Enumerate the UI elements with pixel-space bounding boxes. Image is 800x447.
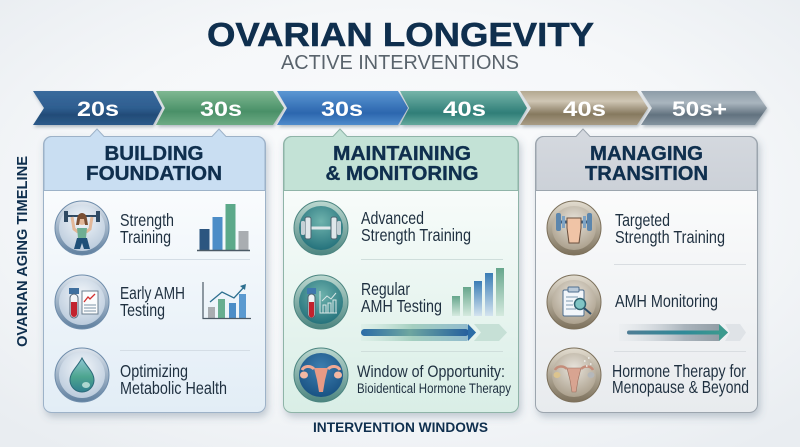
text: hormone therapy for menopause: Menopause & Beyond <box>612 377 749 397</box>
bar chart: rising amh <box>452 268 504 316</box>
header: managing transition: TRANSITION <box>585 163 708 185</box>
text: regular amh testing: AMH Testing <box>361 296 442 316</box>
icon: fading uterus <box>547 348 601 402</box>
chevron: 40s teal: 40s <box>443 98 486 121</box>
panel: managing transition <box>536 129 758 412</box>
chevron: 40s taupe: 40s <box>563 98 606 121</box>
chevron: 40s taupe <box>520 91 648 125</box>
text: hormone therapy for menopause <box>612 361 749 397</box>
header: building foundation: FOUNDATION <box>86 163 222 185</box>
panel: building foundation <box>44 129 266 412</box>
arrow: progress <box>361 324 507 341</box>
chart: rising trend <box>203 282 251 318</box>
header: maintaining and monitoring <box>284 129 518 190</box>
footer label: INTERVENTION WINDOWS <box>313 420 488 435</box>
icon: fist with dumbbell <box>547 201 601 255</box>
chevron: 50s+ <box>641 91 767 125</box>
chevron: 50s+: 50s+ <box>672 98 727 121</box>
title: OVARIAN LONGEVITY <box>207 16 594 53</box>
chevron: 40s teal <box>400 91 527 125</box>
text: early amh testing <box>120 283 185 320</box>
icon: water drop <box>55 348 109 402</box>
text: targeted strength training <box>615 210 725 247</box>
text: early amh testing: Early AMH <box>120 283 185 303</box>
subtitle: ACTIVE INTERVENTIONS <box>281 52 519 74</box>
header: maintaining and monitoring: MAINTAINING <box>333 143 471 165</box>
header: managing transition: MANAGING <box>590 143 703 165</box>
text: optimizing metabolic health <box>120 361 227 398</box>
text: early amh testing: Testing <box>120 300 165 320</box>
chevron: 20s: 20s <box>77 98 119 121</box>
text: amh monitoring: AMH Monitoring <box>615 291 718 311</box>
panel: maintaining and monitoring <box>284 129 518 412</box>
text: advanced strength training <box>361 208 471 245</box>
text: window of opportunity: Bioidentical Hormone Therapy <box>357 381 511 396</box>
text: hormone therapy for menopause: Hormone Therapy for <box>612 361 746 381</box>
header: building foundation <box>44 129 265 190</box>
header: building foundation: BUILDING <box>104 143 204 165</box>
icon: clipboard with magnifier <box>547 275 601 329</box>
text: targeted strength training: Targeted <box>615 210 670 230</box>
text: strength training <box>120 210 174 247</box>
arrow: progress <box>619 324 746 341</box>
chevron: 30s green <box>156 91 284 125</box>
chevron: 30s blue: 30s <box>321 98 363 121</box>
text: optimizing metabolic health: Metabolic Health <box>120 378 227 398</box>
icon: dumbbell <box>294 201 348 255</box>
bar chart: strength <box>197 204 250 250</box>
vertical axis label: OVARIAN AGING TIMELINE <box>15 156 31 347</box>
text: regular amh testing <box>361 279 442 316</box>
text: advanced strength training: Advanced <box>361 208 424 228</box>
text: optimizing metabolic health: Optimizing <box>120 361 188 381</box>
chevron: 30s green: 30s <box>200 98 242 121</box>
header: managing transition <box>536 129 757 190</box>
text: window of opportunity <box>357 362 511 396</box>
text: targeted strength training: Strength Training <box>615 227 725 247</box>
icon: woman lifting weights <box>55 201 109 255</box>
age timeline chevrons <box>33 91 767 125</box>
text: strength training: Training <box>120 227 171 247</box>
text: regular amh testing: Regular <box>361 279 410 299</box>
text: advanced strength training: Strength Training <box>361 225 471 245</box>
icon: test tube and chart <box>294 275 348 329</box>
icon: uterus <box>294 348 348 402</box>
chevron: 30s blue <box>277 91 408 125</box>
header: maintaining and monitoring: & MONITORING <box>326 163 478 185</box>
icon: test tube and report <box>55 275 109 329</box>
text: window of opportunity: Window of Opportunity: <box>357 362 505 381</box>
chevron: 20s <box>33 91 162 125</box>
text: strength training: Strength <box>120 210 174 230</box>
